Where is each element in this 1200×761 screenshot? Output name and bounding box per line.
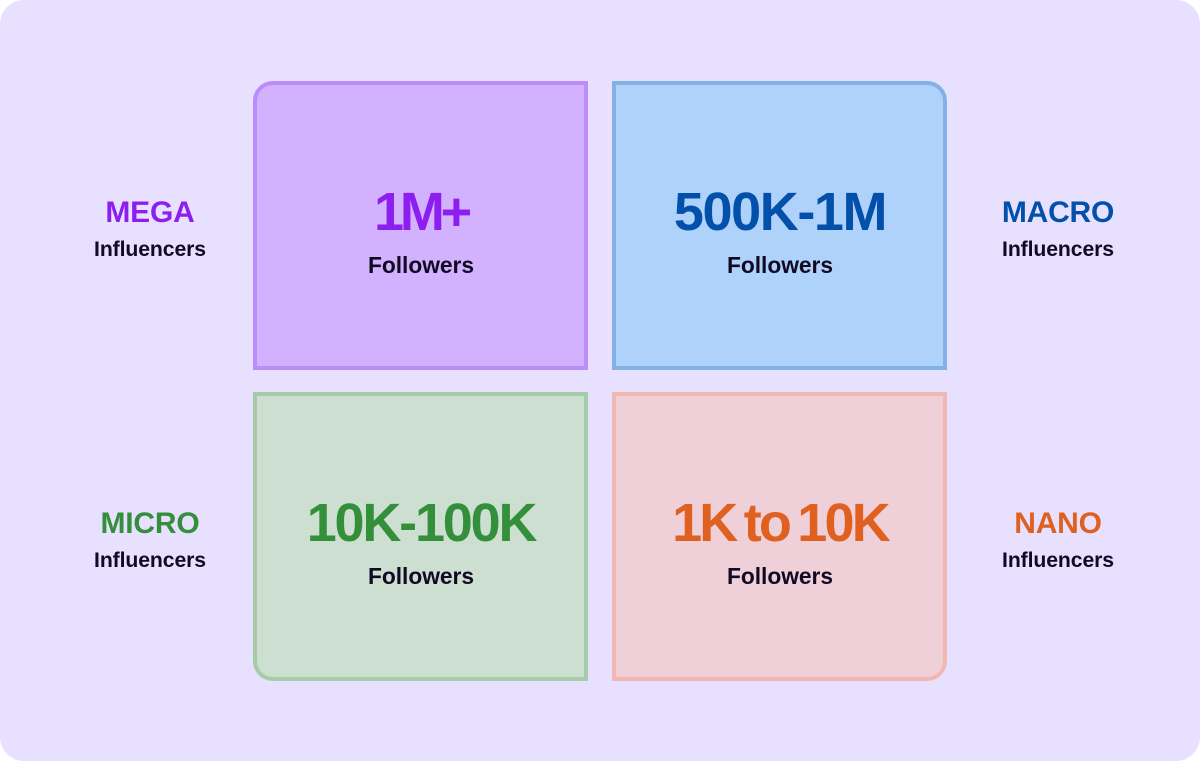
label: macro influencers — [1002, 196, 1114, 261]
panel: mega followers — [253, 81, 588, 370]
panel: nano followers — [612, 392, 947, 681]
mega follower range: 1M+ — [374, 182, 468, 242]
label: macro influencers: MACRO — [1002, 196, 1114, 229]
micro followers label: Followers — [368, 563, 474, 589]
label: micro influencers: MICRO — [100, 507, 200, 540]
label: micro influencers: Influencers — [94, 549, 206, 572]
panel: macro followers — [612, 81, 947, 370]
nano follower range: 1K to 10K — [672, 493, 888, 553]
label: mega influencers — [94, 196, 206, 261]
nano followers label: Followers — [727, 563, 833, 589]
macro follower range: 500K-1M — [674, 182, 886, 242]
label: mega influencers: Influencers — [94, 238, 206, 261]
label: nano influencers: NANO — [1014, 507, 1102, 540]
label: nano influencers — [1002, 507, 1114, 572]
label: macro influencers: Influencers — [1002, 238, 1114, 261]
macro followers label: Followers — [727, 252, 833, 278]
micro follower range: 10K-100K — [307, 493, 535, 553]
label: nano influencers: Influencers — [1002, 549, 1114, 572]
panel: micro followers — [253, 392, 588, 681]
label: mega influencers: MEGA — [105, 196, 195, 229]
label: micro influencers — [94, 507, 206, 572]
mega followers label: Followers — [368, 252, 474, 278]
